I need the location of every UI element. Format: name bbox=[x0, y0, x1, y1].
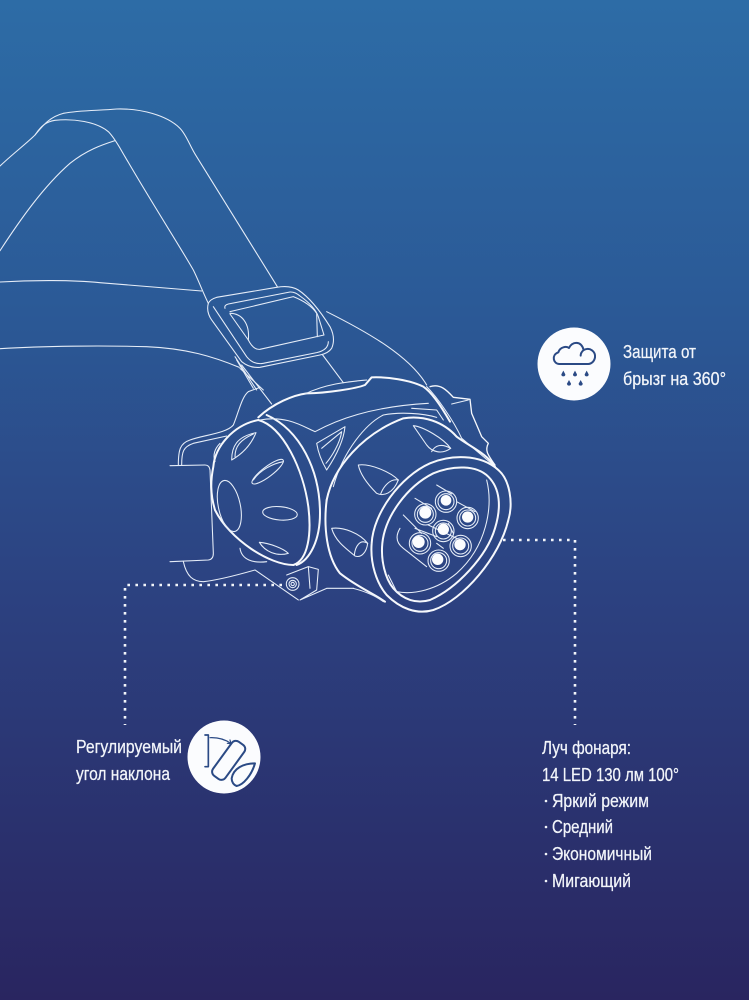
text: adjustable angle: угол наклона bbox=[76, 764, 171, 784]
text: beam specifications: Средний bbox=[552, 817, 613, 837]
strap buckle bbox=[208, 287, 333, 390]
LED array bbox=[397, 485, 478, 571]
text: splash protection: брызг на 360° bbox=[623, 369, 726, 389]
dotted leader: tilt angle bbox=[125, 585, 282, 725]
text: adjustable angle: Регулируемый bbox=[76, 737, 182, 757]
text: beam specifications: Экономичный bbox=[552, 844, 652, 864]
headlamp body line drawing bbox=[170, 312, 511, 612]
top housing and teeth bbox=[258, 377, 495, 487]
text: adjustable angle bbox=[76, 737, 182, 784]
text: splash protection: Защита от bbox=[623, 342, 696, 362]
text: beam specifications: Мигающий bbox=[552, 871, 631, 891]
icon: rain cloud bbox=[538, 328, 610, 400]
pivot hinge bbox=[286, 567, 353, 600]
text: splash protection bbox=[623, 342, 726, 389]
text: beam specifications: Яркий режим bbox=[552, 791, 649, 811]
rear strap and mount bbox=[170, 312, 427, 600]
left housing pod bbox=[211, 415, 320, 565]
text: beam specifications bbox=[542, 738, 679, 891]
dotted leader: beam bbox=[503, 540, 575, 725]
right housing pod bbox=[325, 417, 495, 602]
lens rings bbox=[371, 457, 511, 612]
icon: tilt angle bbox=[188, 720, 260, 794]
text: beam specifications: Луч фонаря: bbox=[542, 738, 631, 758]
text: beam specifications: 14 LED 130 лм 100° bbox=[542, 765, 679, 785]
headband strap line drawing bbox=[0, 109, 343, 383]
